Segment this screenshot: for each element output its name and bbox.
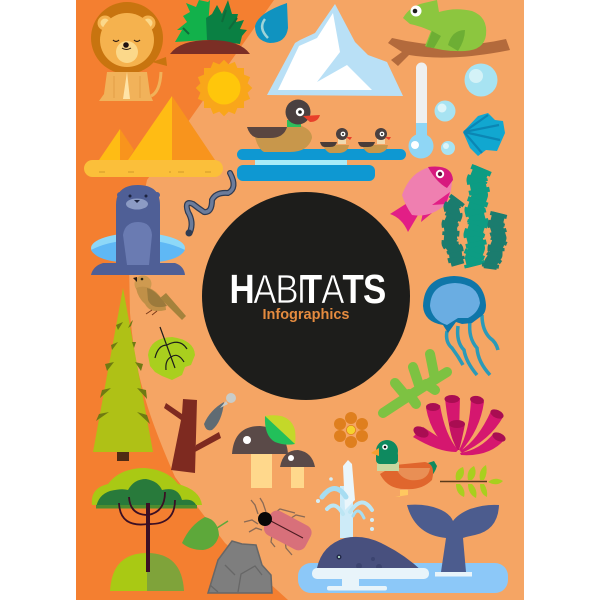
icon: snake <box>186 173 234 236</box>
soil mound <box>170 40 250 54</box>
title: A <box>253 267 277 313</box>
water <box>237 149 406 160</box>
icon: flower <box>334 412 368 448</box>
icon: beetle <box>244 498 314 555</box>
icon: seashell <box>463 113 505 156</box>
duckling 1 <box>320 128 352 153</box>
perched bird <box>204 393 236 430</box>
icon: water drop <box>255 3 288 43</box>
icon: magenta coral <box>412 395 507 455</box>
icon: grass tuft <box>170 0 250 54</box>
icon: fir tree <box>93 288 153 461</box>
icon: coral branch <box>383 354 447 413</box>
subtitle: Infographics <box>262 307 350 323</box>
icon: sun <box>196 60 252 116</box>
title: S <box>363 267 386 313</box>
icon: mallard duck <box>371 440 437 497</box>
icon: mushrooms and leaf <box>232 415 315 488</box>
icon: duck family on water <box>237 100 406 181</box>
background: light orange panel <box>76 0 524 600</box>
title: I <box>297 267 306 313</box>
water spout <box>316 460 374 538</box>
icon: chameleon on branch <box>388 0 510 66</box>
icon: fern sprig <box>440 465 503 498</box>
icons: bubbles <box>434 64 498 155</box>
icon: seaweed <box>450 168 500 269</box>
icon: thermometer <box>408 63 434 159</box>
icon: bare tree stump with bird <box>164 393 236 473</box>
hill <box>110 553 147 591</box>
icon: otter on ice <box>91 185 185 275</box>
background: dark orange band <box>76 0 288 600</box>
icon: whale tail <box>407 505 499 572</box>
water foam <box>312 568 472 590</box>
title: T <box>301 267 322 313</box>
icon: robin <box>133 276 186 320</box>
title: T <box>343 267 364 313</box>
icon: rock <box>208 541 272 593</box>
title: H <box>230 267 255 313</box>
tentacles <box>447 315 498 375</box>
title: A <box>321 267 345 313</box>
icon: lime leaf <box>148 327 195 380</box>
icon: pool of water <box>298 563 508 593</box>
icon: acacia tree <box>92 468 202 591</box>
icon: lion <box>91 2 167 101</box>
icon: whale with water spout <box>316 460 422 571</box>
leaf <box>265 415 296 444</box>
icon: pyramids <box>84 96 223 177</box>
icon: iceberg <box>267 4 403 96</box>
icon: jellyfish <box>423 276 498 375</box>
duckling 2 <box>358 128 391 153</box>
mother duck <box>247 100 320 152</box>
title: B <box>275 267 299 313</box>
icon: pink fish <box>390 167 453 232</box>
icon: green leaf <box>182 517 228 550</box>
central black circle <box>202 192 410 400</box>
sand <box>84 160 223 177</box>
